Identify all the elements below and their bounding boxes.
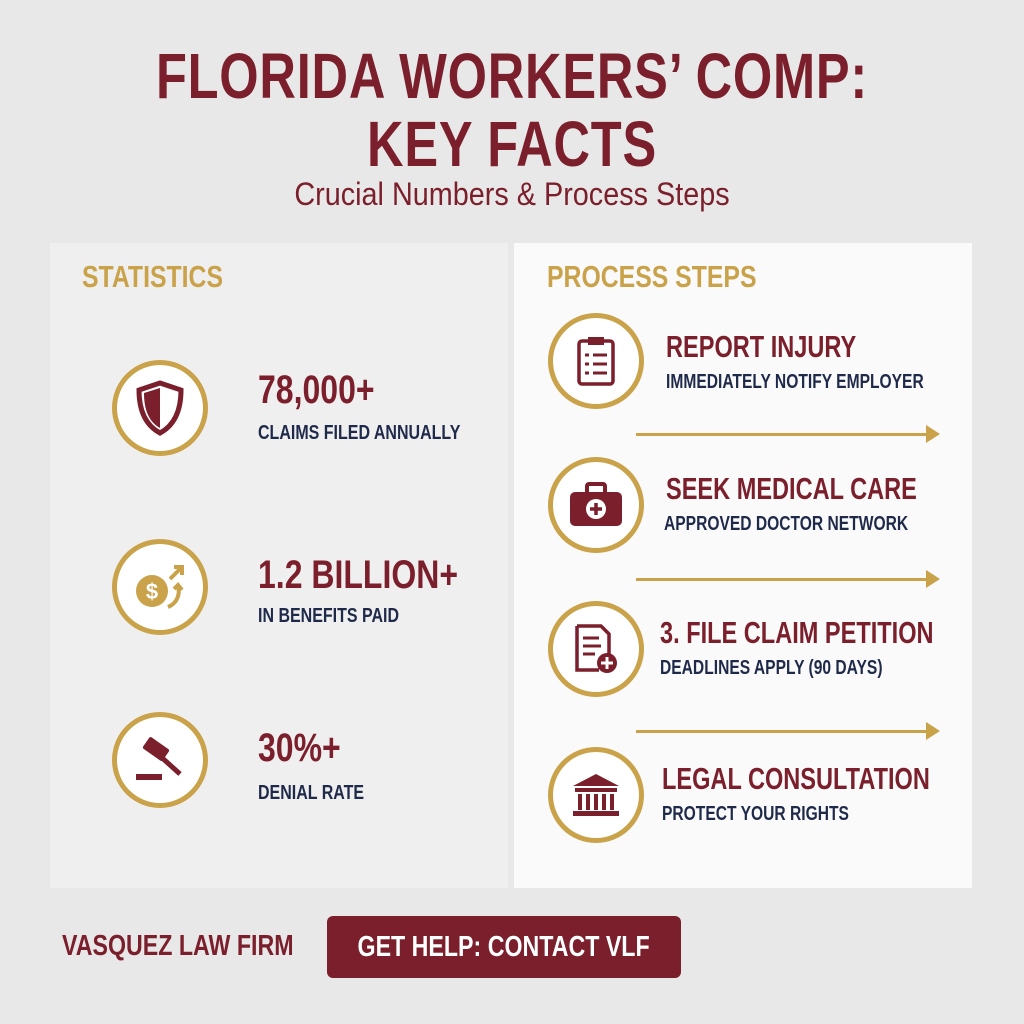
subtitle: Crucial Numbers & Process Steps bbox=[294, 176, 730, 212]
arrow 1 bbox=[636, 433, 930, 436]
button: contact: GET HELP: CONTACT VLF bbox=[358, 930, 650, 962]
step 2: SEEK MEDICAL CARE bbox=[666, 471, 917, 506]
stat: denial: 30%+ bbox=[258, 726, 341, 770]
step 4: PROTECT YOUR RIGHTS bbox=[662, 803, 849, 825]
icon: dollar coin bbox=[112, 539, 208, 635]
button: contact bbox=[327, 916, 681, 978]
step 3 bbox=[548, 601, 934, 697]
step 2 bbox=[548, 457, 917, 553]
arrow 3 bbox=[636, 730, 930, 733]
title: FLORIDA WORKERS’ COMP: bbox=[156, 40, 868, 112]
step 2: APPROVED DOCTOR NETWORK bbox=[664, 513, 908, 535]
stat: claims: 78,000+ bbox=[258, 368, 375, 412]
stat: denial: DENIAL RATE bbox=[258, 782, 364, 804]
title: KEY FACTS bbox=[367, 108, 657, 180]
heading: process steps: PROCESS STEPS bbox=[547, 259, 756, 294]
arrow 2 bbox=[636, 578, 930, 581]
icon: dollar coin: $ bbox=[146, 579, 158, 604]
step 4 bbox=[548, 747, 930, 843]
title bbox=[156, 40, 868, 180]
stat: claims bbox=[112, 360, 460, 456]
heading: statistics: STATISTICS bbox=[82, 259, 223, 294]
icon: document plus bbox=[548, 601, 644, 697]
icon: shield bbox=[112, 360, 208, 456]
step 1: IMMEDIATELY NOTIFY EMPLOYER bbox=[666, 371, 924, 393]
panel: process steps bbox=[514, 243, 972, 888]
step 1: REPORT INJURY bbox=[666, 329, 856, 364]
stat: benefits: IN BENEFITS PAID bbox=[258, 605, 399, 627]
step 3: DEADLINES APPLY (90 DAYS) bbox=[660, 657, 883, 679]
stat: benefits bbox=[112, 539, 458, 635]
footer: firm name: VASQUEZ LAW FIRM bbox=[62, 930, 294, 962]
step 4: LEGAL CONSULTATION bbox=[662, 761, 930, 796]
stat: denial bbox=[112, 712, 364, 808]
icon: clipboard bbox=[548, 313, 644, 409]
stat: claims: CLAIMS FILED ANNUALLY bbox=[258, 422, 460, 444]
icon: gavel bbox=[112, 712, 208, 808]
icon: medical kit bbox=[548, 457, 644, 553]
icon: courthouse bbox=[548, 747, 644, 843]
panel: statistics bbox=[50, 243, 508, 888]
step 1 bbox=[548, 313, 924, 409]
stat: benefits: 1.2 BILLION+ bbox=[258, 553, 458, 597]
step 3: 3. FILE CLAIM PETITION bbox=[660, 615, 934, 650]
